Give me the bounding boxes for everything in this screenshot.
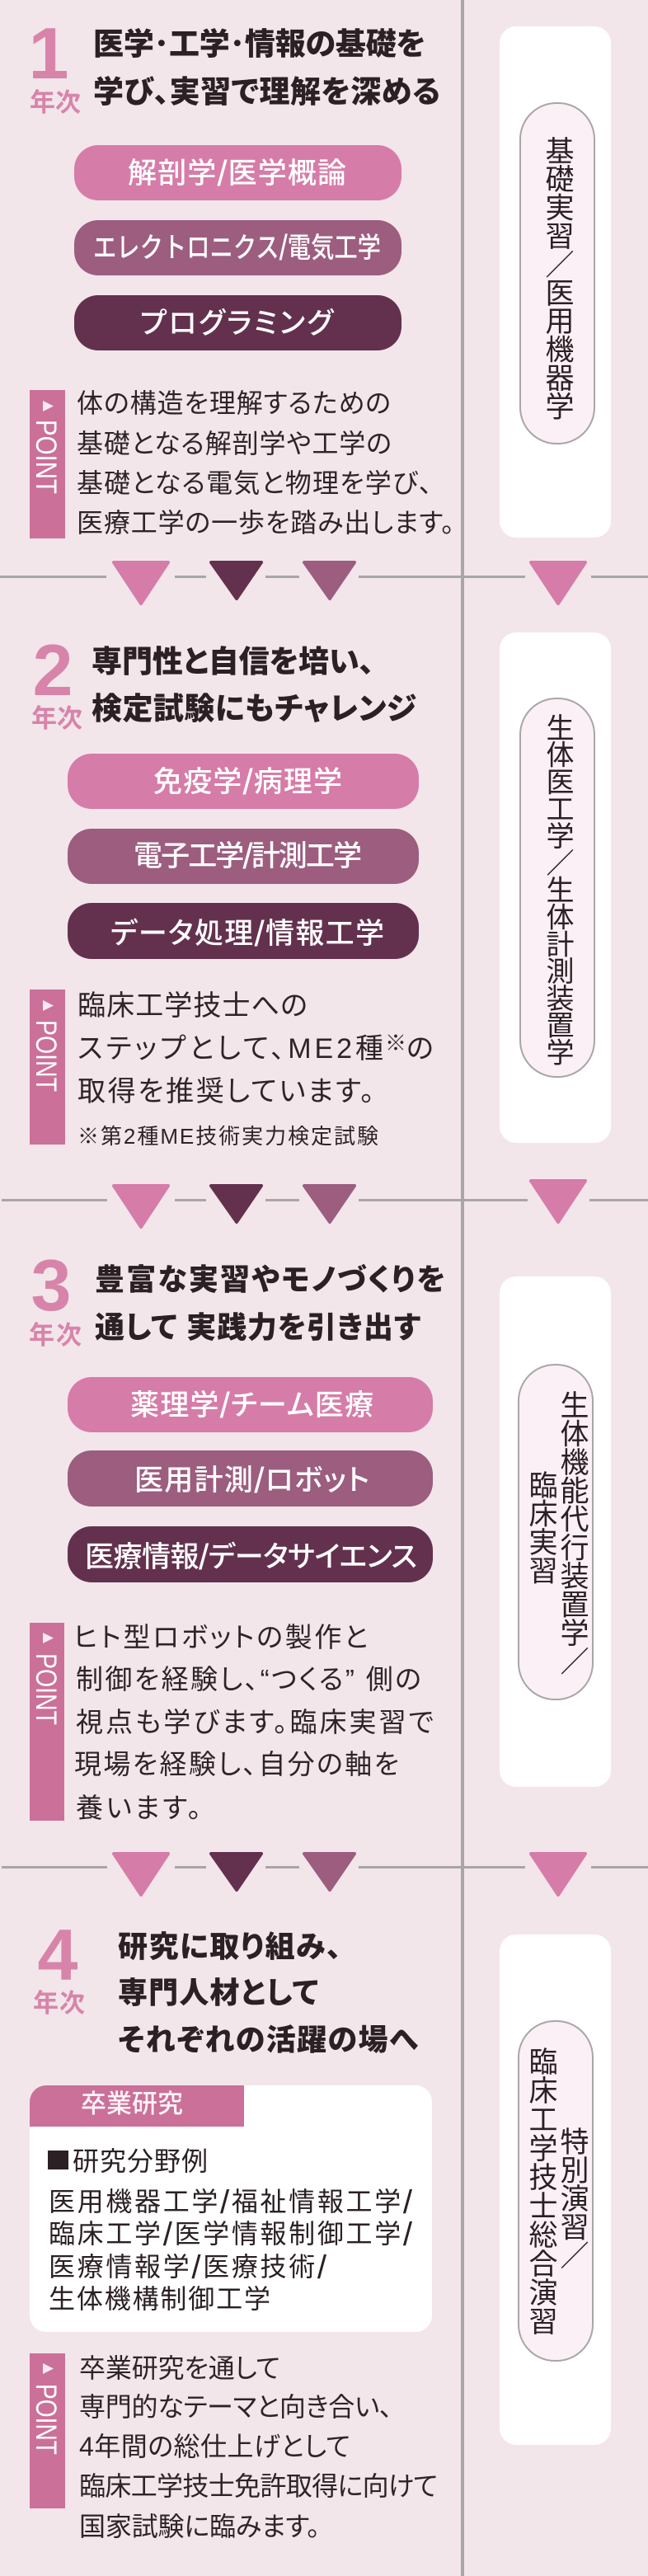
year 4 POINT text: 4年間の総仕上げとして — [79, 2432, 350, 2461]
panel: year 2 — [30, 629, 611, 1149]
year 2 subject pills — [68, 754, 419, 959]
year 2 POINT text: の — [406, 1033, 434, 1065]
year 1 subject pills: エレクトロニクス — [93, 233, 317, 264]
year 4 heading: 研究に取り組み、 — [118, 1930, 341, 1963]
year 1 POINT text: 医療工学の一歩を踏み出します。 — [77, 508, 454, 538]
year 4 heading: それぞれの活躍の場へ — [118, 2023, 419, 2057]
year 1 badge: 1 — [29, 12, 68, 94]
year 3 subject pills: 医用計測 — [134, 1464, 253, 1497]
year 3 POINT text — [73, 1622, 434, 1823]
year 1 heading: 医学･工学･情報の基礎を — [93, 27, 425, 61]
year 4 practical course panel: 臨床工学技士総合演習 — [524, 2047, 557, 2335]
graduation research card: / — [191, 2249, 201, 2286]
year 1 subject pills: 電気工学 — [288, 233, 381, 264]
year 3 practical course panel: 臨床実習 — [524, 1470, 557, 1584]
panel: year 4 — [30, 1914, 611, 2541]
year 3 POINT text: 養います。 — [76, 1793, 201, 1823]
year 2 subject pills: データ処理 — [110, 918, 253, 950]
graduation research card: 生体機構制御工学 — [49, 2284, 270, 2314]
year 3 subject pills: ロボット — [265, 1464, 369, 1497]
panel: year 1 — [29, 12, 611, 538]
year 2 POINT label: POINT — [30, 1020, 62, 1092]
year 4 badge: 4 — [38, 1914, 78, 1995]
year 2 subject pills: 病理学 — [254, 766, 342, 798]
graduation research card: 研究分野例 — [73, 2146, 208, 2176]
year 4 POINT text: 卒業研究を通して — [79, 2353, 280, 2383]
year 1 heading: 学び、実習で理解を深める — [93, 75, 440, 109]
year 2 heading: 検定試験にもチャレンジ — [92, 692, 416, 726]
year 3 POINT label — [30, 1623, 64, 1821]
graduation research card: / — [403, 2216, 413, 2253]
year 3 heading: 豊富な実習やモノづくりを — [95, 1262, 445, 1296]
year 3 badge — [29, 1244, 82, 1350]
year 3 subject pills: データサイエンス — [209, 1541, 417, 1573]
year 3 badge: 3 — [31, 1244, 71, 1326]
graduation research card: / — [403, 2184, 413, 2221]
year 2 subject pills: 情報工学 — [265, 918, 384, 950]
year 1 POINT label — [30, 390, 65, 538]
year 1 POINT text: 基礎となる電気と物理を学び、 — [77, 468, 432, 498]
year 2 badge: 2 — [33, 629, 73, 711]
year 2 POINT label — [30, 990, 65, 1145]
year 2 subject pills: 免疫学 — [153, 766, 242, 798]
year 3 POINT text: 視点も学びます。臨床実習で — [76, 1707, 434, 1737]
year 2 subject pills: 計測工学 — [251, 840, 362, 872]
year 1 subject pills: / — [217, 153, 228, 194]
year 4 POINT text: 国家試験に臨みます。 — [79, 2512, 320, 2541]
year 3 heading: 通して 実践力を引き出す — [95, 1310, 420, 1344]
year 2 subject pills: / — [254, 914, 265, 954]
year 4 POINT label — [30, 2353, 65, 2508]
graduation research card: 医学情報制御工学 — [174, 2219, 401, 2249]
year 2 POINT text: 臨床工学技士への — [77, 990, 308, 1022]
graduation research card: / — [163, 2216, 173, 2253]
year 3 subject pills: チーム医療 — [231, 1389, 373, 1422]
year 3 subject pills: / — [254, 1460, 265, 1501]
graduation research card: / — [317, 2249, 327, 2286]
year 2 POINT text: ※第2種ME技術実力検定試験 — [77, 1124, 378, 1149]
year 2 heading — [92, 645, 416, 726]
graduation research card: 卒業研究 — [81, 2089, 183, 2118]
year 4 heading: 専門人材として — [118, 1976, 318, 2010]
year 2 POINT text: 取得を推奨しています。 — [77, 1076, 374, 1107]
year 3 POINT label: POINT — [30, 1653, 62, 1725]
year 2 subject pills: / — [242, 836, 253, 877]
graduation research card: 医療技術 — [203, 2252, 315, 2282]
year 1 subject pills — [74, 145, 401, 350]
arrows: year 1 to 2 — [114, 562, 585, 604]
year 3 badge: 年次 — [29, 1321, 82, 1350]
year 1 POINT label: POINT — [30, 420, 62, 494]
year 1 heading — [93, 27, 440, 109]
year 2 heading: 専門性と自信を培い、 — [92, 645, 374, 679]
graduation research card: 福祉情報工学 — [232, 2187, 401, 2216]
year 2 badge — [31, 629, 82, 733]
year 1 subject pills: 解剖学 — [128, 157, 216, 190]
year 3 practical course panel: 生体機能代行装置学／ — [556, 1390, 589, 1675]
year 1 POINT text — [77, 388, 454, 538]
year 2 subject pills: 電子工学 — [134, 840, 244, 872]
year 1 subject pills: プログラミング — [140, 308, 335, 340]
year 3 POINT text: 現場を経験し、自分の軸を — [74, 1749, 399, 1779]
panel: year 3 — [29, 1244, 611, 1823]
year 1 practical course panel — [500, 26, 611, 538]
year 4 POINT text — [79, 2353, 438, 2541]
year 1 subject pills: 医学概論 — [228, 157, 346, 190]
year 2 badge: 年次 — [31, 704, 82, 733]
year 3 subject pills — [68, 1377, 433, 1582]
year 4 heading — [118, 1930, 419, 2057]
year 3 POINT text: ヒト型ロボットの製作と — [73, 1622, 368, 1652]
year 2 POINT text — [77, 990, 434, 1149]
year 2 POINT text: ステップとして、ME2種 — [77, 1033, 383, 1065]
year 3 subject pills: 薬理学 — [130, 1389, 218, 1422]
year 2 subject pills: / — [242, 762, 253, 802]
year 2 practical course panel: 生体医工学／生体計測装置学 — [542, 713, 573, 1065]
year 4 POINT text: 専門的なテーマと向き合い、 — [79, 2392, 392, 2422]
year 3 subject pills: / — [199, 1537, 209, 1577]
year 3 subject pills: / — [220, 1385, 231, 1426]
graduation research card: / — [220, 2184, 230, 2221]
year 4 POINT label: POINT — [30, 2384, 62, 2455]
year 1 badge: 年次 — [30, 88, 81, 117]
year 1 POINT text: 基礎となる解剖学や工学の — [77, 429, 392, 458]
year 3 heading — [95, 1262, 445, 1344]
arrows: year 3 to 4 — [114, 1854, 585, 1895]
year 2 POINT text: ※ — [385, 1031, 406, 1055]
year 1 POINT text: 体の構造を理解するための — [77, 388, 391, 418]
year 3 POINT text: 制御を経験し、“つくる” 側の — [76, 1664, 421, 1695]
year 4 badge — [33, 1914, 85, 2018]
graduation research card: 医療情報学 — [49, 2252, 190, 2282]
year 2 practical course panel — [500, 632, 611, 1143]
year 3 subject pills: 医療情報 — [85, 1541, 200, 1573]
year 1 subject pills: / — [279, 228, 288, 268]
arrows: year 2 to 3 — [114, 1181, 585, 1227]
graduation research card: 臨床工学 — [49, 2219, 161, 2249]
year 4 practical course panel — [500, 1934, 611, 2445]
year 4 POINT text: 臨床工学技士免許取得に向けて — [79, 2471, 438, 2501]
year 1 badge — [29, 12, 81, 117]
graduation research card: 医用機器工学 — [49, 2187, 218, 2216]
year 1 practical course panel: 基礎実習／医用機器学 — [541, 136, 574, 420]
year 4 badge: 年次 — [33, 1989, 85, 2018]
year 4 practical course panel: 特別演習／ — [556, 2127, 589, 2269]
graduation research card — [30, 2085, 432, 2332]
year 3 practical course panel — [500, 1276, 611, 1787]
